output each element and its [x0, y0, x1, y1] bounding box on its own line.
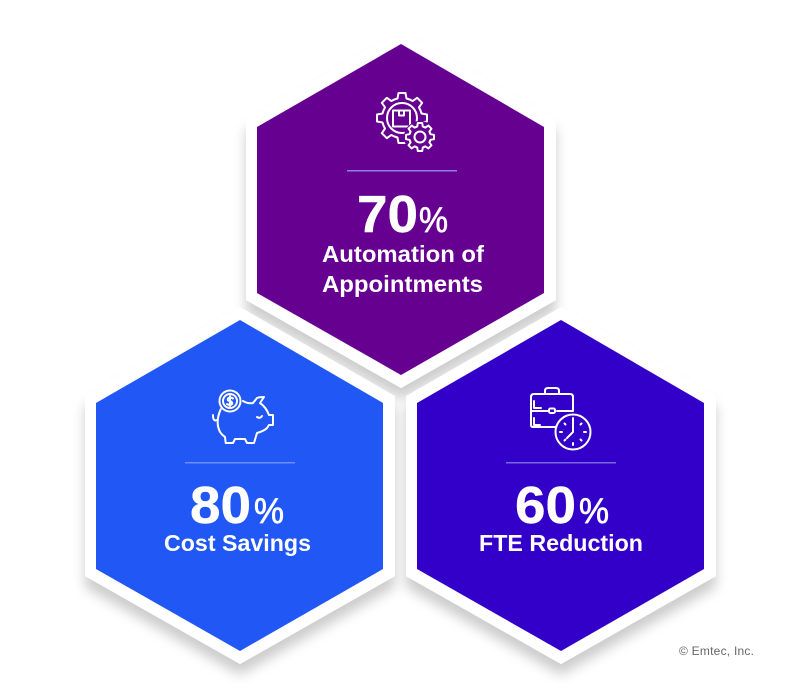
icon: piggy bank	[213, 390, 273, 443]
panel: fte reduction	[406, 307, 716, 664]
label: automation of appointments: Automation of	[322, 241, 484, 267]
stat: 70%: 70	[357, 186, 418, 244]
stat: 70%	[357, 186, 448, 244]
stat: 80%: %	[254, 492, 284, 531]
label: cost savings: Cost Savings	[164, 530, 311, 556]
copyright: © Emtec, Inc.	[679, 644, 754, 658]
stat: 60%: %	[579, 492, 609, 531]
stat: 70%: %	[419, 201, 448, 240]
divider	[185, 462, 295, 464]
stat: 80%: 80	[190, 477, 251, 535]
divider	[506, 462, 616, 464]
stat: 60%	[515, 477, 609, 535]
icon: gear with box	[377, 93, 434, 151]
stat: 80%	[190, 477, 284, 535]
panel: cost savings	[85, 307, 395, 664]
icon: briefcase and clock	[531, 388, 590, 450]
divider	[347, 170, 457, 172]
label line two: Appointments	[322, 271, 483, 297]
panel: automation of appointments	[246, 31, 556, 388]
label: fte reduction: FTE Reduction	[479, 530, 643, 556]
stat: 60%: 60	[515, 477, 576, 535]
